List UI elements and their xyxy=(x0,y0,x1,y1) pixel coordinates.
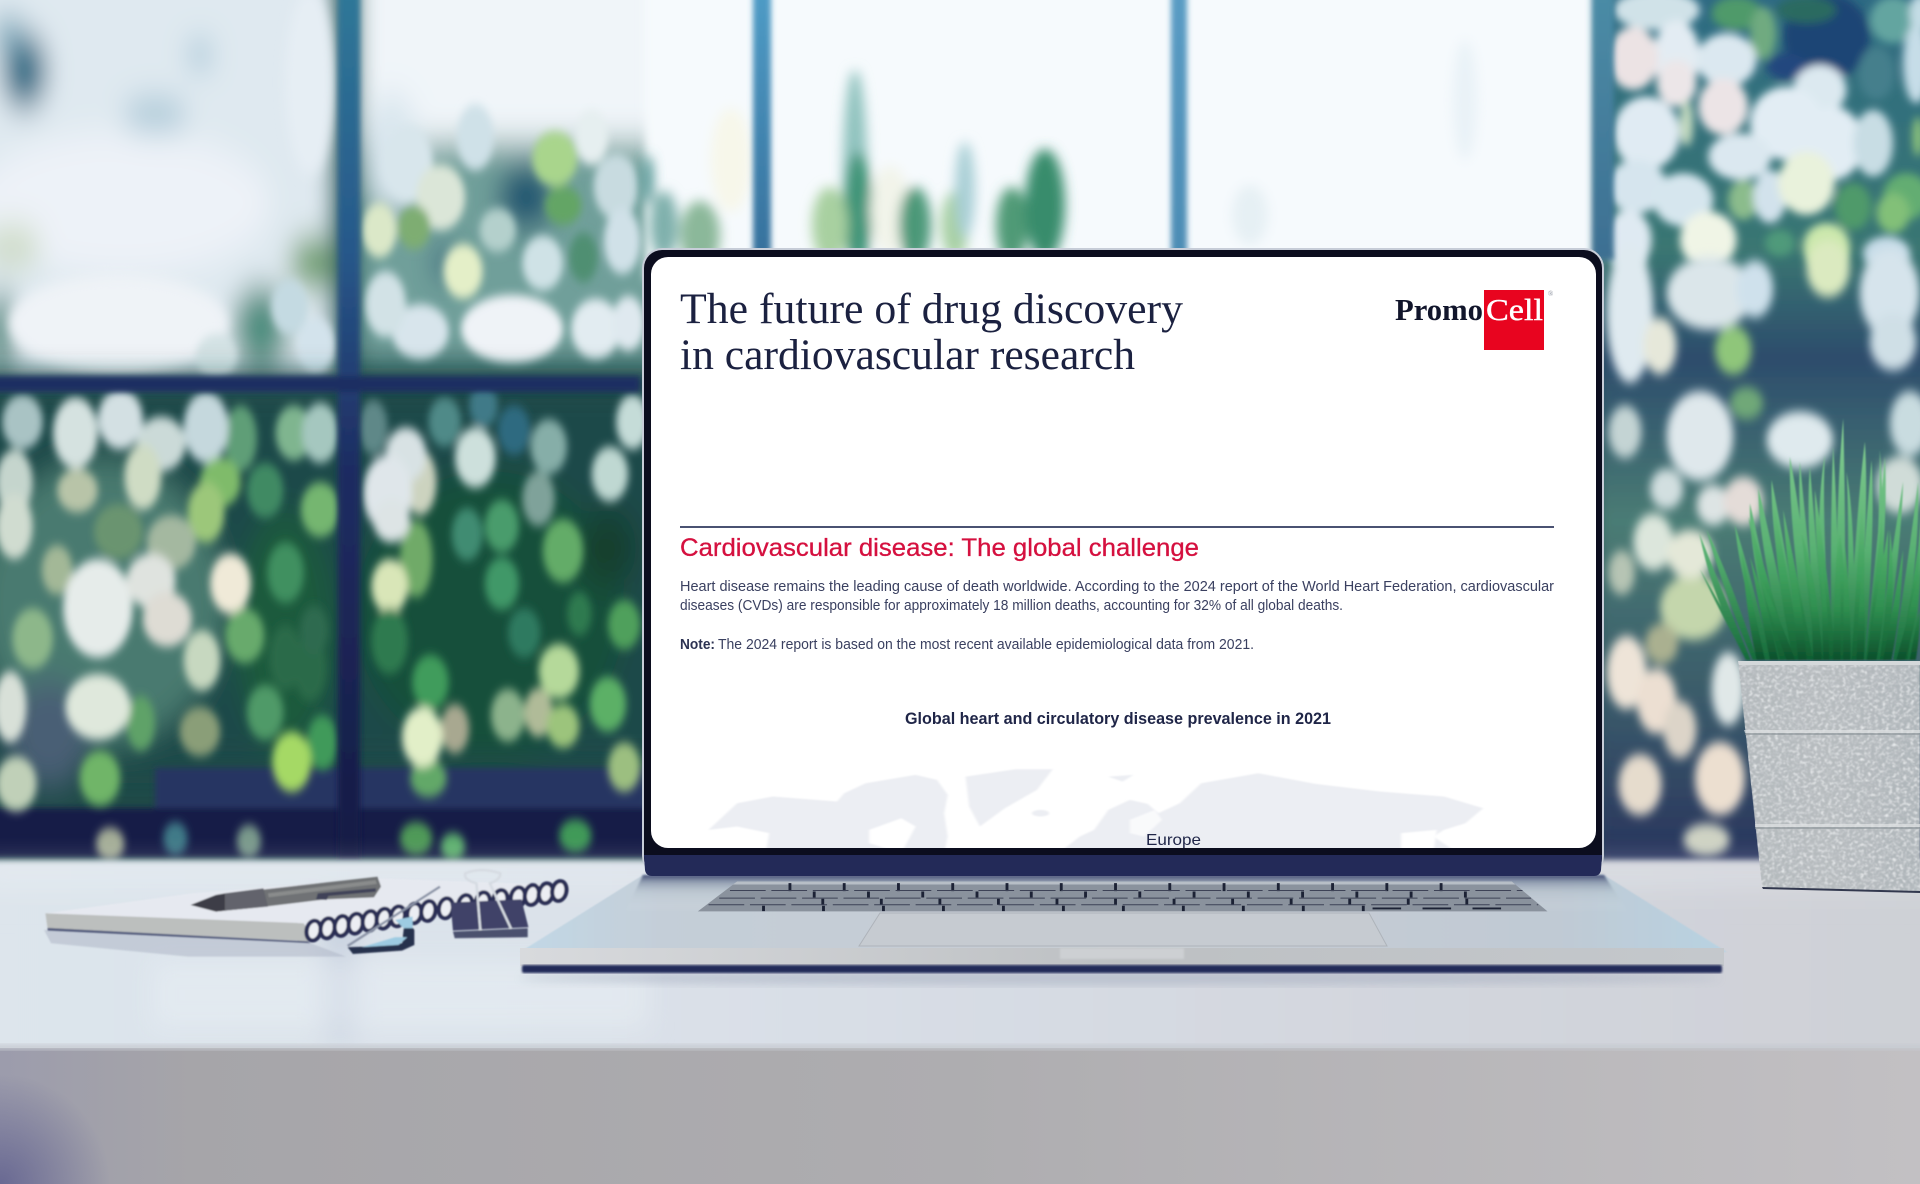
opening notch xyxy=(1060,948,1184,959)
icon: glasses xyxy=(348,887,440,954)
laptop lid xyxy=(642,248,1604,876)
PromoCell logo: ® xyxy=(1548,290,1554,298)
page title: The future of drug discovery xyxy=(680,286,1183,333)
page title xyxy=(680,292,1183,370)
centre panes: green stalks xyxy=(643,40,1477,270)
world map xyxy=(709,769,1483,853)
lower foliage base xyxy=(0,384,685,789)
laptop front shadow edge xyxy=(522,965,1722,973)
chart heading: Global heart and circulatory disease prevalence in 2021 xyxy=(905,710,1331,728)
icon: binder clip xyxy=(450,870,528,938)
map label: Europe: Europe xyxy=(1146,832,1201,849)
trackpad xyxy=(859,913,1387,946)
note: The 2024 report is based on the most recent available epidemiological data from 2021. xyxy=(718,637,1254,653)
bottom strip of window lights xyxy=(96,819,592,860)
window frame mullions xyxy=(0,0,1614,860)
divider rule xyxy=(680,526,1554,528)
second pane sky xyxy=(355,0,681,367)
table edge softening xyxy=(0,1044,1920,1050)
PromoCell logo: Promo xyxy=(1395,292,1483,327)
lower frame band xyxy=(0,768,650,858)
blurred window background xyxy=(0,0,1920,880)
table front face xyxy=(0,1048,1920,1184)
spiral binding xyxy=(305,880,568,942)
map gaps xyxy=(869,811,1436,848)
notebook page xyxy=(45,878,564,927)
laptop screen xyxy=(651,257,1596,853)
laptop front lip xyxy=(520,948,1724,966)
right pane foliage xyxy=(1607,240,1920,856)
laptop xyxy=(520,248,1727,985)
grass xyxy=(1699,418,1920,660)
laptop base shadow xyxy=(520,971,1720,985)
right column base xyxy=(1598,0,1920,880)
left pane sky xyxy=(0,0,339,378)
icon: pen xyxy=(191,877,381,912)
intro paragraph: Heart disease remains the leading cause of death worldwide. According to the 2024 report of the World Heart Federation, cardiovascular xyxy=(680,579,1554,595)
second pane sky highlights xyxy=(196,104,645,378)
section heading: Cardiovascular disease: The global challenge xyxy=(680,534,1199,562)
centre panes: bright sky xyxy=(645,0,1605,280)
bokeh lights: lower window panes xyxy=(0,384,649,811)
plant in galvanised pot xyxy=(1699,418,1920,893)
intro paragraph xyxy=(680,579,1554,614)
intro paragraph: diseases (CVDs) are responsible for approximately 18 million deaths, accounting for 32% of all global deaths. xyxy=(680,598,1343,614)
PromoCell logo xyxy=(1395,290,1554,350)
notebook page edges xyxy=(45,913,314,942)
left pane sky highlights xyxy=(8,0,335,373)
purple tint at table corner xyxy=(0,1074,110,1184)
keyboard xyxy=(698,881,1547,911)
table xyxy=(0,860,1920,1184)
lid hinge band xyxy=(644,855,1602,876)
notebook shadow xyxy=(44,930,346,957)
PromoCell logo: Cell xyxy=(1486,292,1543,327)
laptop deck xyxy=(520,875,1727,952)
top right pane foliage xyxy=(1605,0,1920,270)
page title: in cardiovascular research xyxy=(680,332,1135,379)
notebook with pen, glasses and clip xyxy=(44,870,568,957)
table top surface xyxy=(0,860,1920,1052)
table top highlight and reflections xyxy=(0,864,1920,1040)
note: Note: xyxy=(680,637,715,653)
pot body xyxy=(1738,661,1920,893)
